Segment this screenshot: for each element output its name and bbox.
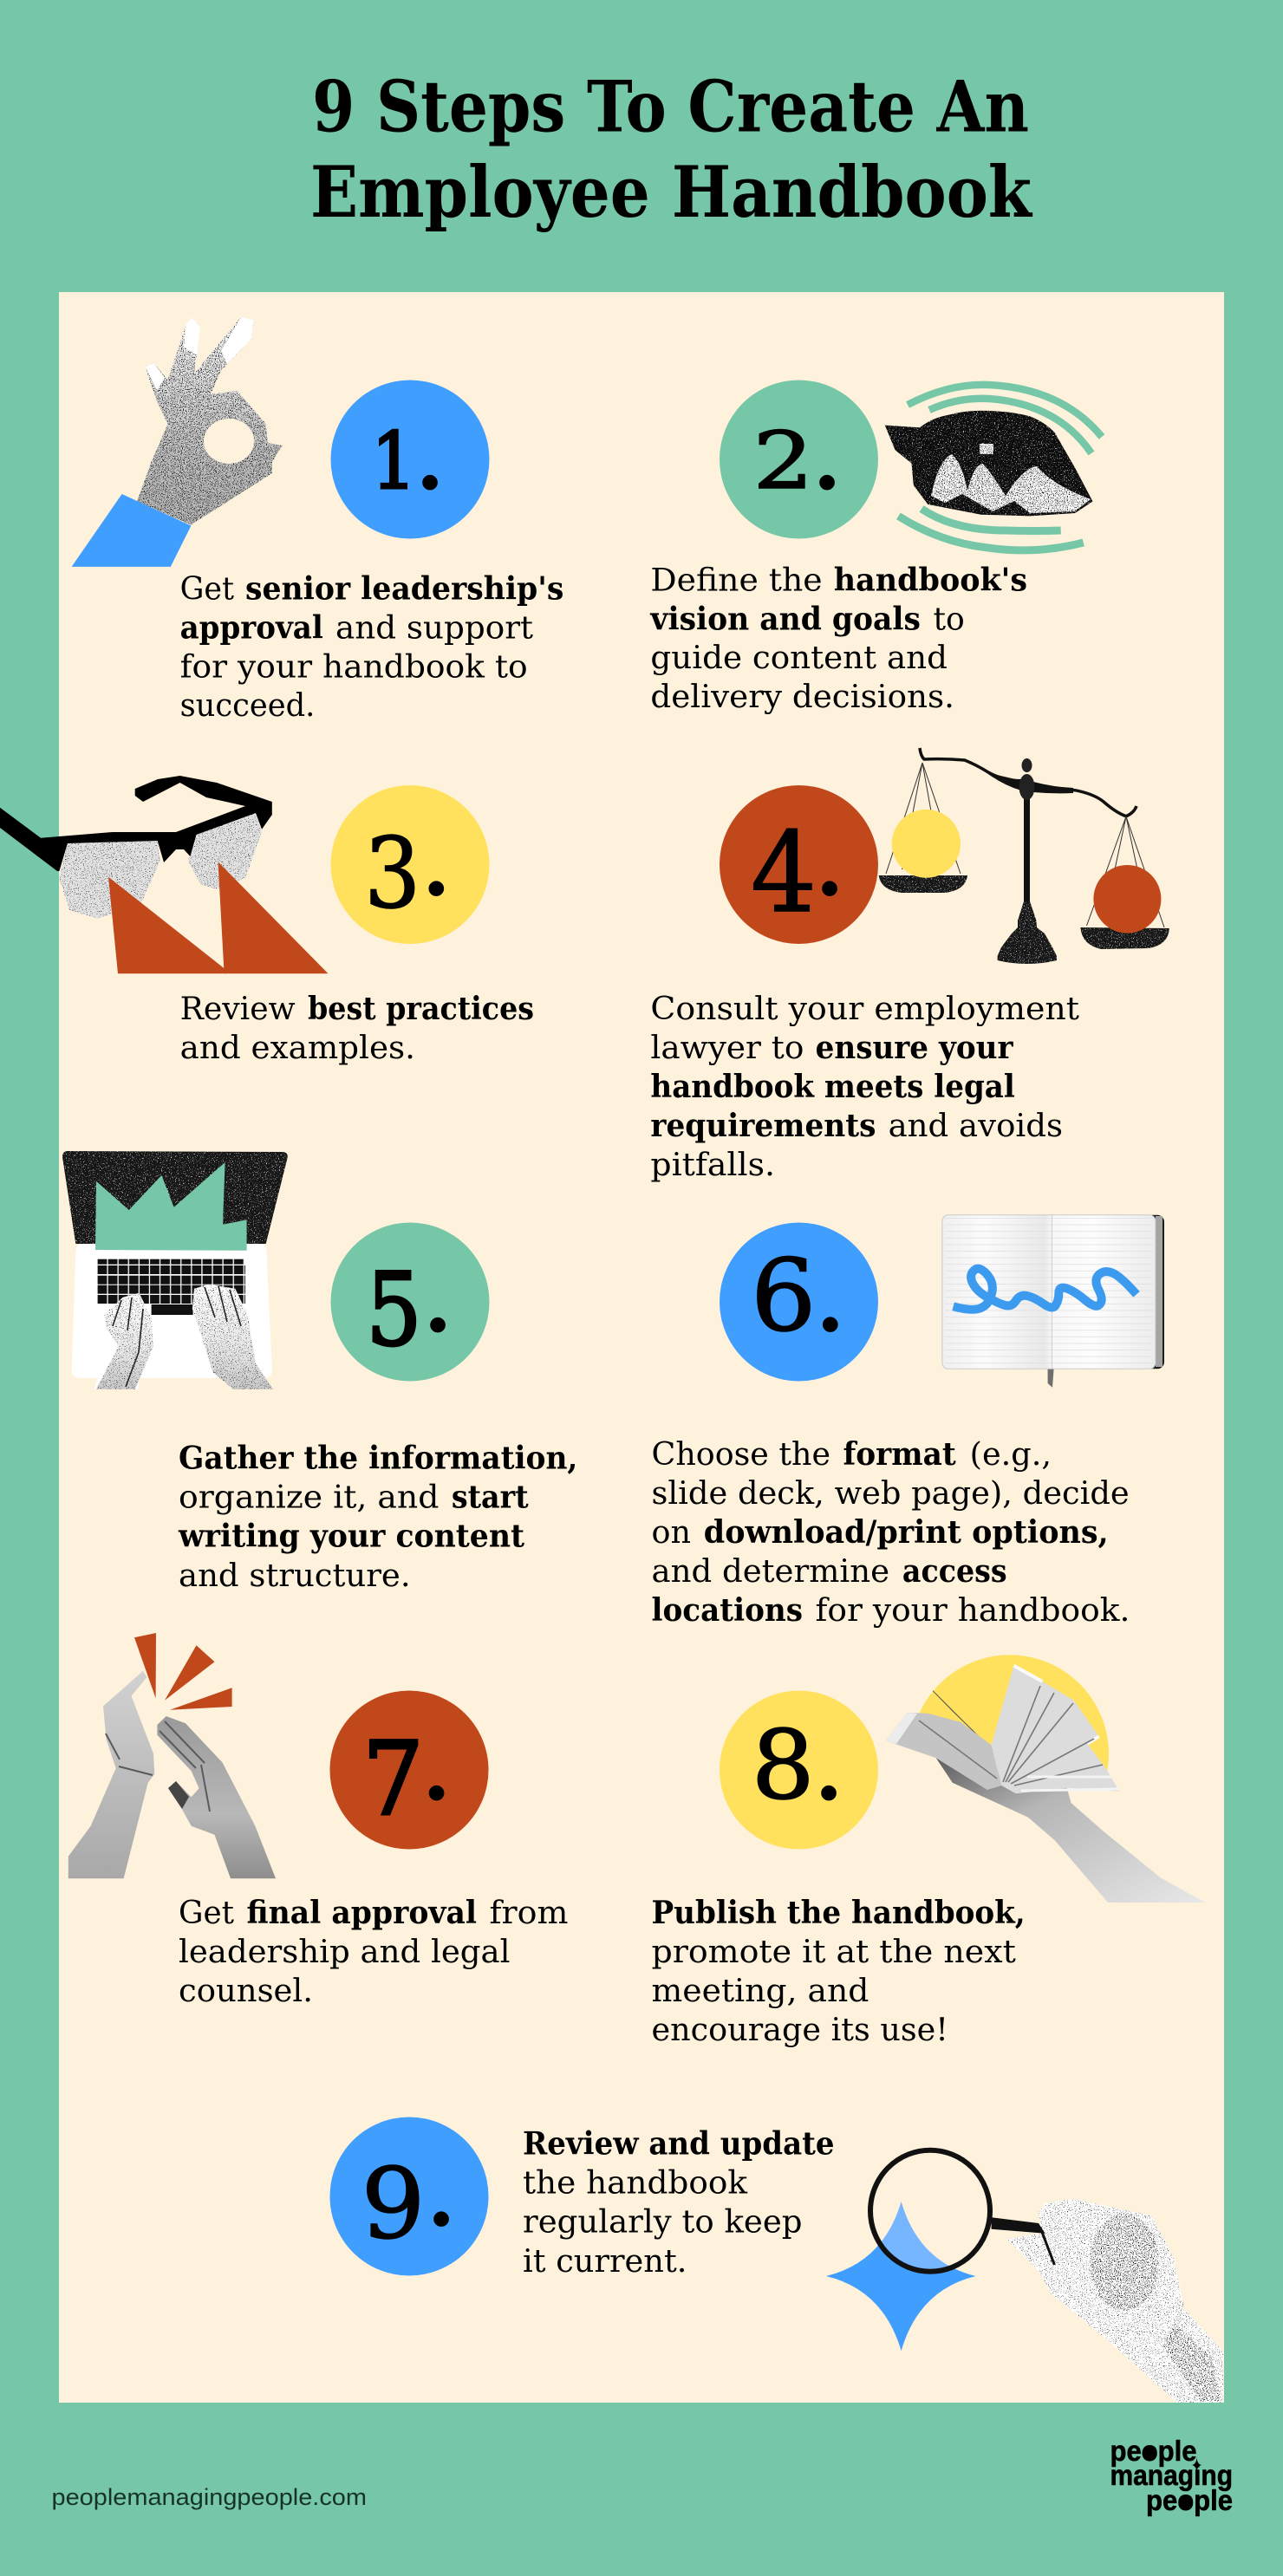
logo: people managing people: people [1146, 2484, 1233, 2516]
title: 9 Steps To Create An [312, 67, 1029, 149]
text: step 2 [649, 563, 1027, 715]
number circle 5 [331, 1222, 489, 1382]
icon: clapping hands with rust sparks [68, 1633, 276, 1878]
text: step 4: lawyer to [650, 1031, 804, 1066]
icon: balance scale [879, 748, 1169, 964]
icon: eye with teal arcs [885, 385, 1102, 550]
logo: people managing people [1110, 2435, 1233, 2516]
text: step 6: (e.g., [970, 1437, 1052, 1473]
text: step 3: and examples. [180, 1031, 415, 1066]
text: step 4: pitfalls. [650, 1148, 775, 1183]
text: step 1: and support [335, 610, 534, 647]
number circle 3 [331, 785, 489, 944]
step 4 [650, 748, 1169, 1183]
number 8: 8 [752, 1709, 815, 1820]
text: step 7: Get [179, 1896, 235, 1931]
text: step 1 [180, 571, 563, 724]
text: step 2: handbook's [834, 563, 1027, 599]
step 8 [652, 1655, 1205, 2048]
footer website url: peoplemanagingpeople.com [52, 2484, 367, 2510]
step 2 [649, 380, 1102, 715]
text: step 9: regularly to keep [523, 2205, 803, 2241]
number 3: . [422, 819, 451, 915]
text: step 2: vision and goals [649, 601, 921, 637]
text: step 2: Define the [650, 563, 823, 599]
text: step 8: Publish the handbook, [652, 1895, 1026, 1931]
icon: OK hand with blue sleeve [72, 317, 283, 567]
text: step 7 [179, 1895, 569, 2009]
text: step 7: leadership and legal [179, 1935, 510, 1970]
step 9 [329, 2117, 1223, 2403]
number 7: . [422, 1723, 451, 1819]
number 4: . [815, 818, 844, 914]
text: step 5: writing your content [178, 1519, 524, 1555]
number circle 7 [329, 1690, 489, 1850]
text: step 6: Choose the [652, 1437, 830, 1473]
number 2 [752, 413, 842, 509]
text: step 4: ensure your [816, 1030, 1013, 1066]
text: step 6: slide deck, web page), decide [652, 1476, 1130, 1512]
text: step 7: counsel. [179, 1974, 313, 2009]
number circle 2 [720, 380, 878, 539]
text: step 8: promote it at the next [652, 1935, 1016, 1970]
text: step 2: delivery decisions. [650, 680, 954, 715]
text: step 3: best practices [308, 991, 534, 1027]
logo: people managing people: managing [1110, 2459, 1233, 2491]
text: step 6: locations [652, 1592, 803, 1629]
text: step 3 [180, 991, 534, 1066]
number 1 [371, 413, 445, 509]
number circle 9 [329, 2117, 489, 2276]
logo: people managing people: people [1110, 2435, 1196, 2467]
text: step 6: access [902, 1553, 1007, 1590]
icon: open notebook with blue squiggle [942, 1215, 1164, 1388]
text: step 8: meeting, and [652, 1974, 869, 2009]
text: step 1: Get [180, 572, 235, 608]
text: step 9: Review and update [523, 2126, 834, 2163]
text: step 2: guide content and [650, 641, 948, 676]
text: step 6: on [652, 1515, 691, 1551]
number 3: 3 [364, 818, 420, 931]
text: step 8 [652, 1895, 1026, 2048]
icon: magnifying glass, hand and blue star [826, 2150, 1223, 2403]
text: step 6: for your handbook. [815, 1593, 1130, 1629]
number 9 [361, 2148, 456, 2261]
title [310, 67, 1033, 234]
text: step 9 [523, 2126, 834, 2280]
text: step 9: the handbook [523, 2166, 748, 2202]
text: step 4: and avoids [889, 1109, 1063, 1144]
icon: glasses with rust triangles [0, 776, 328, 973]
text: step 7: final approval [246, 1895, 477, 1931]
text: step 3: Review [180, 992, 296, 1027]
number 9: 9 [361, 2148, 425, 2261]
step 1 [72, 317, 563, 724]
text: step 8: encourage its use! [652, 2013, 948, 2048]
text: step 6 [652, 1436, 1130, 1629]
text: step 5 [178, 1440, 577, 1594]
step 7 [68, 1633, 569, 2009]
text: step 6: download/print options, [704, 1514, 1109, 1551]
text: step 7: from [489, 1896, 569, 1931]
text: step 4: Consult your employment [650, 992, 1080, 1027]
text: step 4: requirements [650, 1108, 876, 1144]
number 5: . [423, 1255, 453, 1351]
number 4: 4 [751, 809, 817, 937]
text: step 1: for your handbook to [180, 649, 528, 685]
step 5 [62, 1151, 577, 1594]
number 6: 6 [751, 1238, 817, 1354]
text: step 1: senior leadership's [245, 571, 563, 608]
text: step 1: approval [180, 610, 323, 647]
panel: cream content background [59, 292, 1224, 2403]
text: step 1: succeed. [180, 688, 315, 724]
text: step 5: organize it, and [179, 1480, 439, 1515]
number 2: 2 [752, 416, 813, 507]
text: step 4: handbook meets legal [650, 1069, 1015, 1105]
number 8: . [814, 1723, 843, 1819]
step 3 [0, 776, 534, 1066]
text: step 4 [650, 992, 1080, 1183]
icon: hand holding open book [886, 1655, 1205, 1903]
text: step 6: format [843, 1436, 956, 1473]
number circle 6 [720, 1222, 878, 1382]
number 7: 7 [362, 1720, 424, 1838]
number 8 [752, 1709, 843, 1820]
number circle 1 [331, 380, 489, 539]
number 6: . [816, 1255, 844, 1351]
number 1: . [415, 413, 445, 509]
number 5: 5 [366, 1252, 422, 1369]
text: step 5: start [452, 1479, 529, 1515]
number 9: . [427, 2150, 456, 2246]
icon: laptop with typing hands [62, 1151, 288, 1389]
text: step 9: it current. [523, 2244, 687, 2280]
step 6 [652, 1215, 1164, 1629]
number 6 [751, 1238, 844, 1354]
number circle 4 [720, 785, 878, 944]
text: step 5: Gather the information, [179, 1440, 577, 1476]
number circle 8 [720, 1690, 878, 1850]
text: step 5: and structure. [179, 1558, 411, 1594]
number 1: 1 [371, 416, 416, 507]
text: step 2: to [933, 602, 965, 637]
title: Employee Handbook [310, 152, 1033, 234]
text: step 6: and determine [652, 1554, 889, 1590]
number 2: . [812, 413, 842, 509]
